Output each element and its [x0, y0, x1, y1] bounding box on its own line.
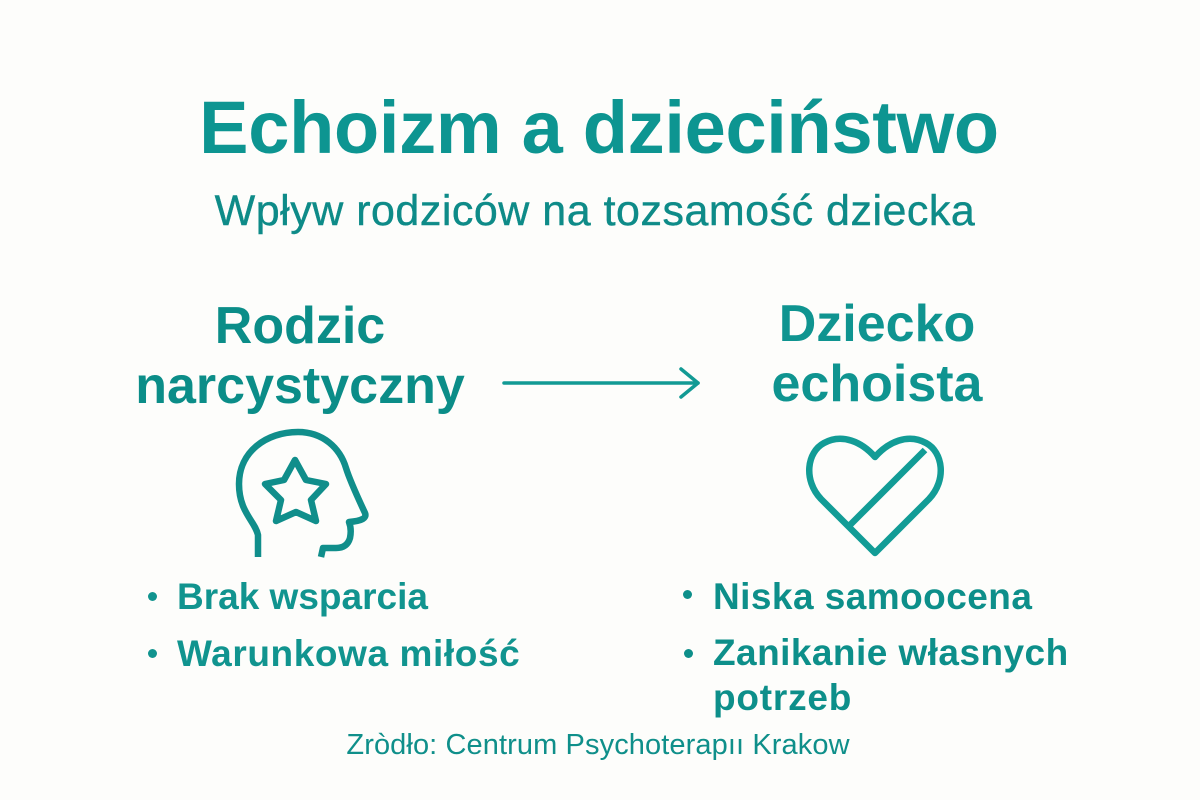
bullet item: Zanikanie własnych potrzeb: [684, 632, 1069, 718]
heading: Dziecko echoista: Dziecko: [779, 295, 975, 353]
heading: Dziecko echoista: echoista: [772, 355, 982, 413]
heading: Dziecko echoista: [772, 295, 983, 413]
list: child traits: [683, 576, 1069, 718]
heading: Rodzic narcystyczny: narcystyczny: [135, 357, 465, 415]
heading: Rodzic narcystyczny: Rodzic: [215, 297, 385, 355]
bullet item: Zanikanie własnych potrzeb: Zanikanie własnych: [713, 632, 1069, 673]
arrow: [502, 367, 700, 399]
icon: heart with diagonal band: [806, 436, 944, 556]
bullet item: Zanikanie własnych potrzeb: potrzeb: [713, 677, 852, 718]
title: Echoizm a dzieciństwo: [199, 86, 999, 169]
bullet item: Brak wsparcia: Brak wsparcia: [177, 576, 428, 617]
icon: head with star: [236, 428, 369, 558]
source note: Zròdło: Centrum Psychoterapıı Krakow: [346, 729, 850, 761]
heading: Rodzic narcystyczny: [135, 297, 465, 415]
bullet item: Warunkowa miłość: Warunkowa miłość: [177, 633, 520, 674]
bullet item: Niska samoocena: Niska samoocena: [713, 576, 1032, 617]
subtitle: Wpływ rodziców na tozsamość dziecka: [215, 187, 975, 235]
list: parent traits: [148, 576, 520, 674]
